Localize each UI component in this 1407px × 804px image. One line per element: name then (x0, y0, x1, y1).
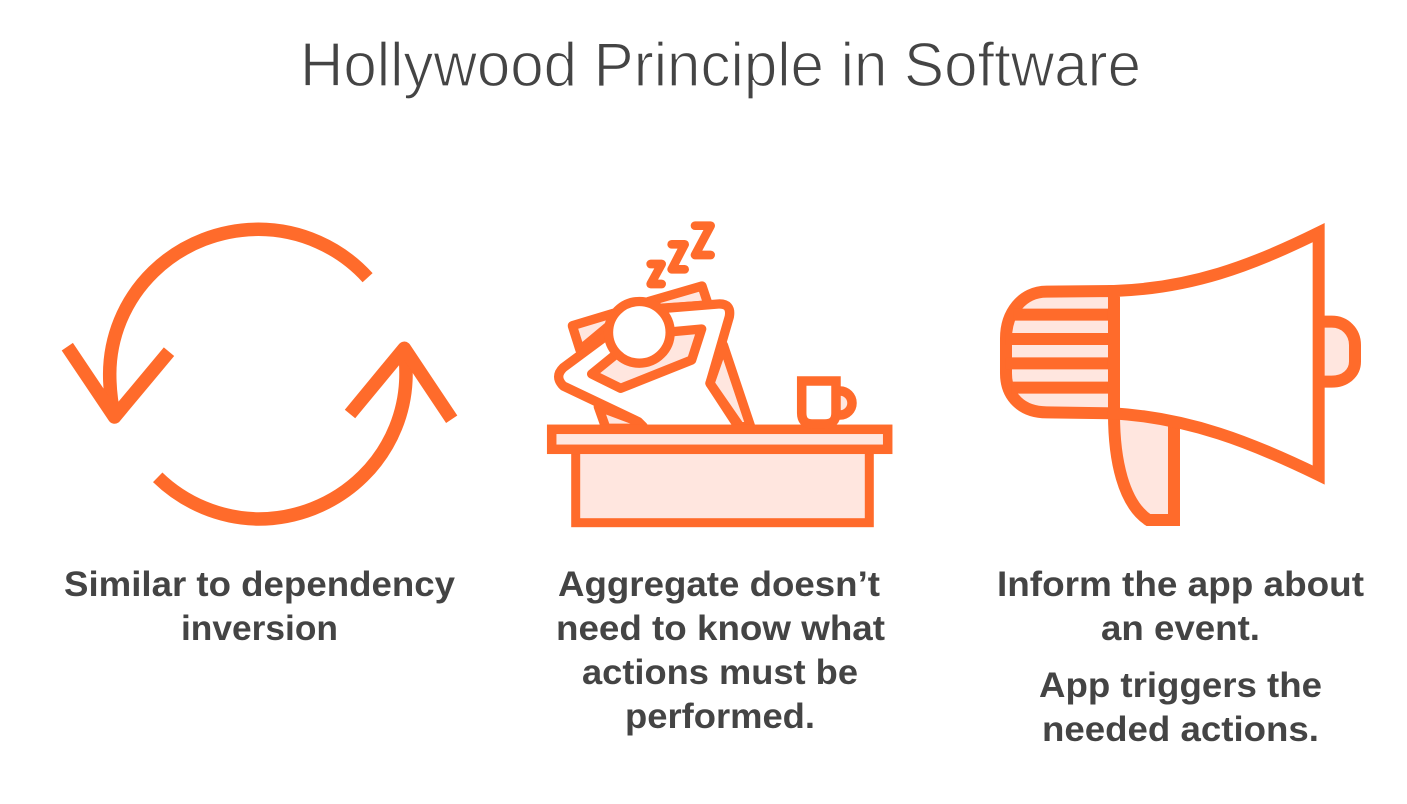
text: aggregate: actions must be (582, 653, 858, 692)
text: app triggers (1039, 666, 1322, 749)
rear knob (1319, 322, 1355, 382)
mug handle (838, 391, 852, 415)
rear stripes (1006, 315, 1114, 388)
body wedge (710, 345, 751, 427)
text: dependency inversion (64, 565, 456, 648)
handle (1114, 414, 1174, 520)
lower leg (598, 407, 642, 428)
rear section (1006, 291, 1114, 413)
text: dependency inversion: Similar to dependency (64, 565, 456, 604)
text: inform the app: Inform the app about (997, 565, 1364, 604)
icon: person sleeping at desk (559, 226, 751, 428)
far hand (572, 313, 613, 350)
text: inform the app: an event. (1101, 609, 1260, 648)
icon: coffee mug (802, 381, 852, 424)
desk base (576, 449, 869, 523)
arm outlines (660, 304, 738, 427)
text: dependency inversion: inversion (181, 609, 338, 648)
text: aggregate: Aggregate doesn’t (558, 565, 880, 604)
text: app triggers: needed actions. (1042, 710, 1319, 749)
text: aggregate: need to know what (556, 609, 885, 648)
icon: circular arrows (67, 229, 452, 519)
text: app triggers: App triggers the (1039, 666, 1322, 705)
near hand (648, 286, 708, 308)
icon: megaphone (1006, 233, 1355, 520)
raised arm and back (559, 304, 738, 427)
forearm (592, 329, 702, 388)
icon: desk (552, 429, 888, 523)
text: inform the app (997, 565, 1364, 648)
snoring letters (651, 226, 711, 284)
text: aggregate: performed. (625, 697, 815, 736)
mug body (802, 381, 836, 424)
desk top (552, 429, 888, 449)
title: Hollywood Principle in Software (300, 31, 1141, 100)
horn (1114, 233, 1319, 475)
head (608, 301, 670, 363)
text: aggregate (556, 565, 885, 736)
